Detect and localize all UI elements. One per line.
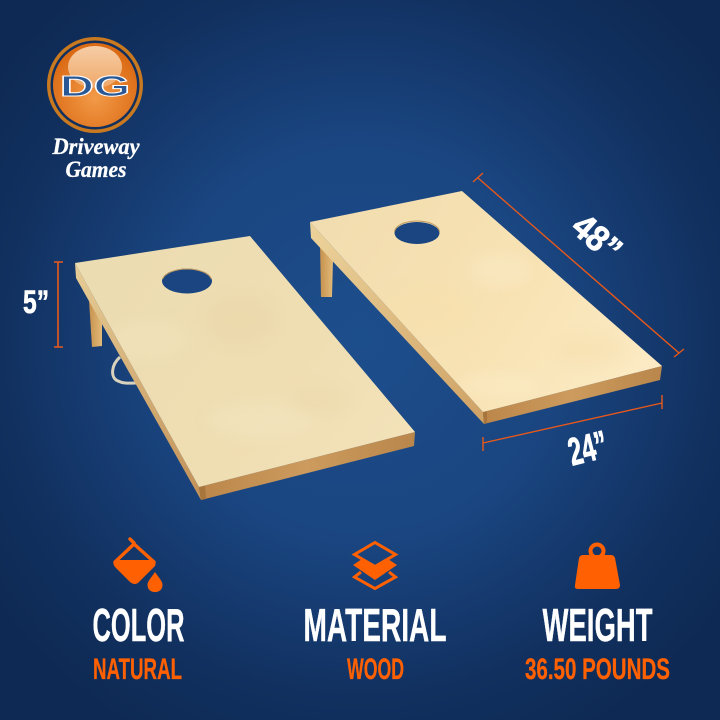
left board leg [89, 300, 102, 347]
left board side edge [75, 263, 201, 500]
dimension: 48 inch length: 48” [564, 205, 630, 270]
dimension: 24 inch width: 24” [564, 423, 612, 474]
left cornhole board [75, 236, 415, 500]
logo: Driveway Games: DG [60, 71, 130, 103]
label: material: MATERIAL [304, 599, 446, 651]
logo: Driveway Games [47, 37, 143, 182]
right cornhole board [310, 191, 662, 424]
icon: kettle weight [575, 544, 620, 589]
feature: color [92, 539, 184, 686]
icon: paint bucket [113, 539, 162, 592]
logo: Driveway Games: Games [66, 157, 127, 182]
dimension: 5 inch height [23, 262, 63, 347]
value: wood: WOOD [347, 653, 404, 686]
right board leg [320, 244, 333, 297]
icon: layers [353, 542, 397, 588]
right board corner end grain [483, 411, 487, 424]
feature: material [304, 542, 446, 686]
right board top [310, 191, 662, 412]
label: color: COLOR [92, 599, 184, 651]
rope handle [113, 357, 136, 383]
left board hole [162, 268, 212, 294]
dimension: 48 inch length [473, 173, 684, 357]
right board grain mottling [392, 261, 612, 388]
left board top [75, 236, 415, 487]
dimension: 24 inch width [483, 395, 662, 474]
right board side edge [310, 222, 484, 424]
dimension: 5 inch height: 5” [23, 284, 49, 320]
right board front edge [483, 366, 662, 424]
left board grain mottling [117, 339, 122, 348]
left board corner end grain [199, 486, 206, 500]
left board front edge [199, 432, 415, 500]
feature: weight [525, 544, 670, 686]
value: natural: NATURAL [93, 653, 182, 686]
logo: Driveway Games: Driveway [52, 134, 140, 159]
right board hole [394, 222, 440, 244]
